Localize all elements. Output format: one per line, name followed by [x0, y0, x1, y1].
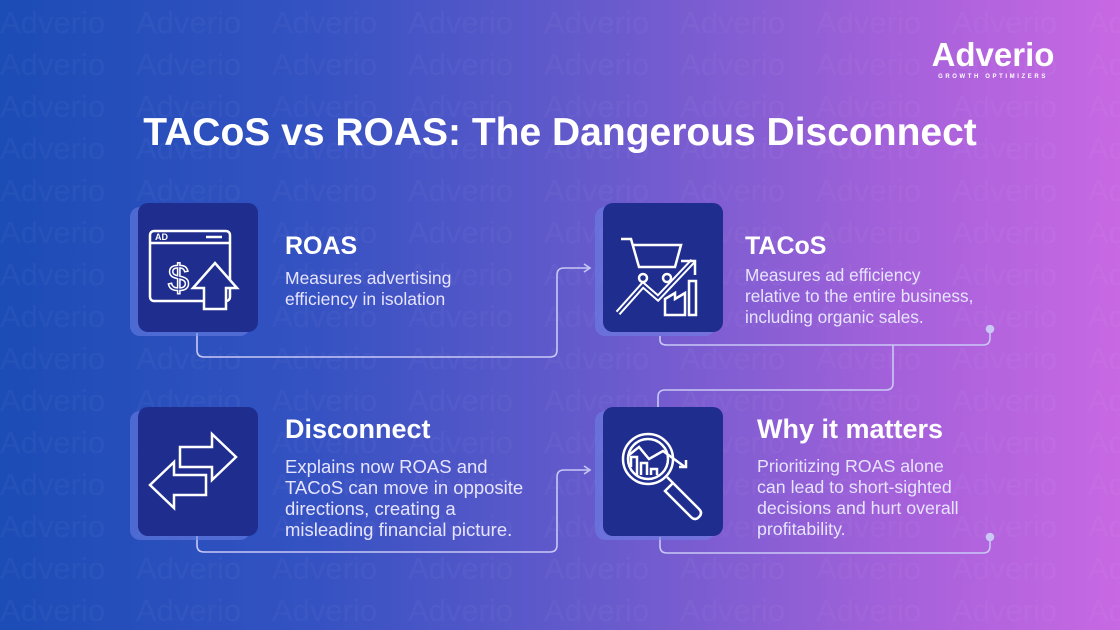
- heading: ROAS: [285, 232, 357, 260]
- logo: GROWTH OPTIMIZERS: [938, 74, 1048, 80]
- icon: cart growth: [603, 203, 723, 332]
- icon: ad dollar up: $: [168, 258, 189, 300]
- text: Prioritizing ROAS alone: [757, 456, 944, 476]
- text: [757, 456, 959, 539]
- text: [745, 265, 973, 327]
- panel: Disconnect: [130, 407, 523, 540]
- panel: ROAS: [130, 203, 451, 336]
- text: TACoS can move in opposite: [285, 477, 523, 498]
- text: relative to the entire business,: [745, 286, 973, 306]
- text: [285, 456, 523, 540]
- text: Measures ad efficiency: [745, 265, 920, 285]
- heading: Disconnect: [285, 414, 431, 444]
- panel: TACoS: [595, 203, 973, 336]
- title: TACoS vs ROAS: The Dangerous Disconnect: [143, 111, 977, 154]
- icon: ad dollar up: [138, 203, 258, 332]
- text: directions, creating a: [285, 498, 456, 519]
- panel: Why it matters: [595, 407, 959, 540]
- heading: TACoS: [745, 232, 826, 260]
- text: decisions and hurt overall: [757, 498, 959, 518]
- icon: magnifier chart: [603, 407, 723, 536]
- icon: opposite arrows: [138, 407, 258, 536]
- text: misleading financial picture.: [285, 519, 512, 540]
- logo: Adverio: [932, 36, 1054, 73]
- text: can lead to short-sighted: [757, 477, 952, 497]
- text: including organic sales.: [745, 307, 924, 327]
- text: [285, 268, 451, 309]
- icon: ad dollar up: AD: [155, 232, 168, 242]
- text: profitability.: [757, 519, 846, 539]
- heading: Why it matters: [757, 414, 943, 444]
- text: Measures advertising: [285, 268, 451, 288]
- text: Explains now ROAS and: [285, 456, 488, 477]
- text: efficiency in isolation: [285, 289, 445, 309]
